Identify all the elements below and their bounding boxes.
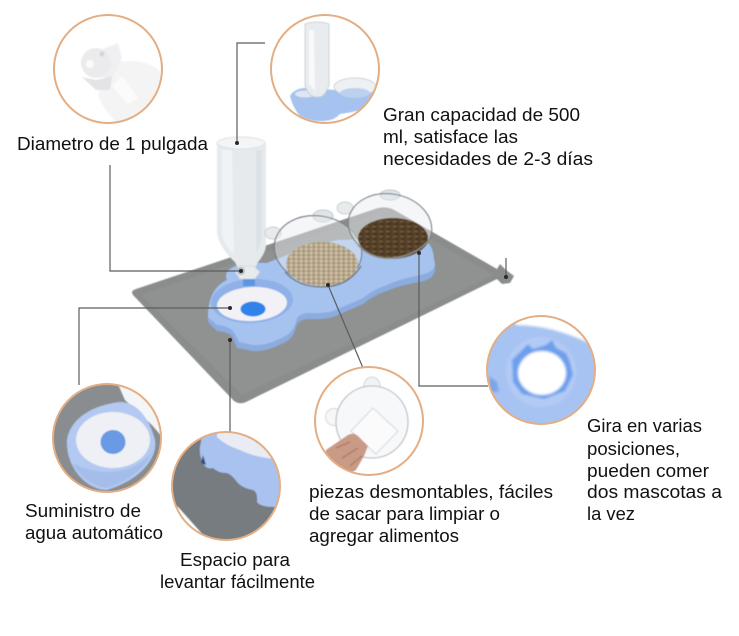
circle: removable bowl detail [315,367,423,478]
leader line dots [228,141,508,342]
circle: lifting space detail [170,430,285,545]
label: removable parts: agregar alimentos [309,525,459,546]
line: bottle neck [110,165,241,271]
circle: automatic water supply detail [50,380,165,495]
label: automatic water: agua automático [25,522,163,543]
label: automatic water [25,500,163,543]
water bottle [217,137,266,279]
circle: bottle capacity detail [271,15,379,123]
label: rotation [587,415,723,524]
silicone mat [132,207,514,403]
label: removable parts: de sacar para limpiar o [309,503,500,524]
circle: rotating base detail [486,315,596,425]
line: bottle capacity [237,43,265,143]
blue base [208,238,435,351]
label: capacity: necesidades de 2-3 días [383,148,593,169]
label: removable parts: piezas desmontables, fáciles [309,481,553,502]
label: rotation: posiciones, [587,438,680,459]
line: rotating base [419,253,488,386]
label: rotation: Gira en varias [587,415,702,436]
miniature base [290,88,378,121]
label: capacity [383,104,593,169]
line: water supply [79,308,230,385]
label: rotation: pueden comer [587,460,709,481]
label: automatic water: Suministro de [25,500,141,521]
label: capacity: ml, satisface las [383,126,518,147]
product: pet feeder on mat [132,137,514,403]
label: lift space: Espacio para [180,549,291,570]
label: bottle diameter: Diametro de 1 pulgada [17,133,209,154]
line: mat corner [505,258,507,277]
circle: bottle neck detail [54,15,163,123]
right bowl with kibble [337,187,437,265]
label: lift space: levantar fácilmente [160,571,315,592]
line: lift space [229,340,231,432]
water bowl [210,277,294,325]
label: lift space [160,549,315,592]
label: rotation: la vez [587,503,635,524]
middle bowl with grain [265,209,367,291]
leader lines [79,43,506,432]
label: removable parts [309,481,553,546]
label: capacity: Gran capacidad de 500 [383,104,580,125]
label: rotation: dos mascotas a [587,481,723,502]
line: removable bowl [328,285,363,368]
